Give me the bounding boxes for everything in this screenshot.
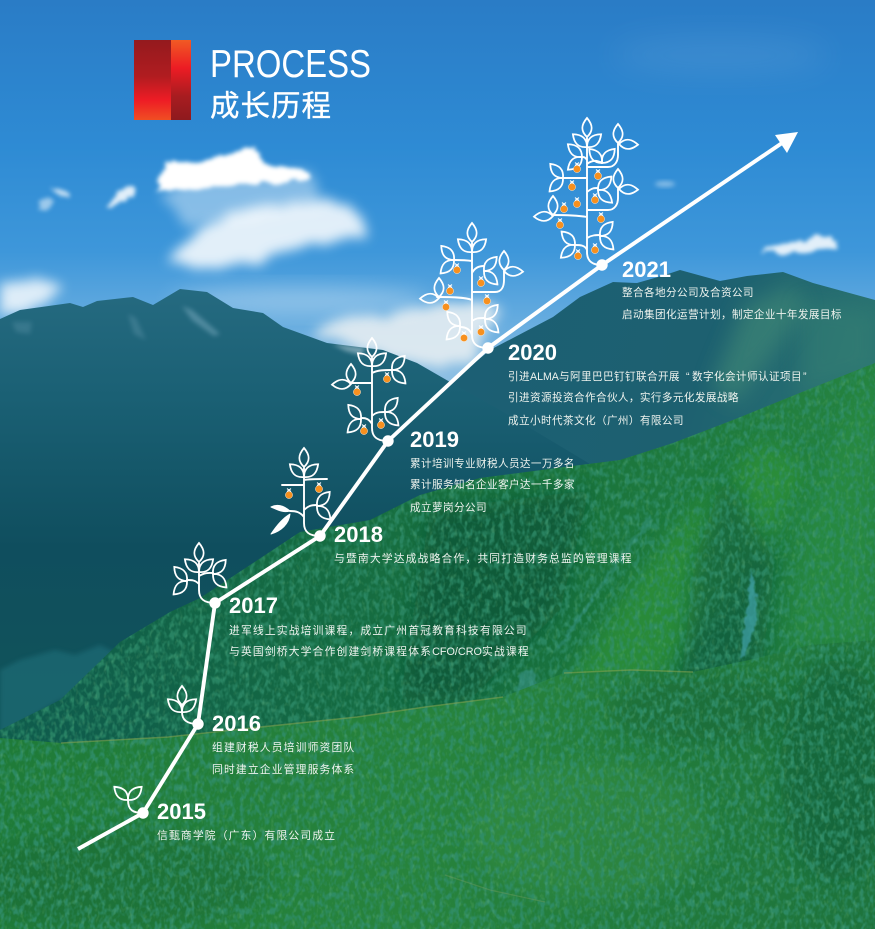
milestone 2020: ” — [803, 371, 807, 383]
milestone 2020: 2020 — [508, 340, 557, 365]
clouds — [0, 37, 835, 368]
milestone 2020: 引进资源投资合作合伙人，实行多元化发展战略 — [508, 391, 739, 404]
milestone 2018: 2018 — [334, 522, 383, 547]
tree 2017 — [170, 543, 230, 603]
milestone 2016: 2016 — [212, 711, 261, 736]
icon: red square — [134, 40, 191, 120]
title block — [134, 40, 371, 123]
milestone 2018: 与暨南大学达成战略合作，共同打造财务总监的管理课程 — [334, 551, 633, 565]
milestone 2019: 累计培训专业财税人员达一万多名 — [410, 457, 575, 470]
milestone 2017: 进军线上实战培训课程，成立广州首冠教育科技有限公司 — [229, 623, 528, 637]
milestone 2021: 2021 — [622, 257, 671, 282]
milestone 2020: 引进ALMA — [508, 371, 559, 383]
milestone 2015: 信甄商学院（广东）有限公司成立 — [157, 828, 336, 842]
milestone 2016 — [212, 711, 355, 776]
heading: PROCESS: PROCESS — [210, 43, 371, 86]
tree 2015 — [111, 783, 145, 813]
milestone 2015 — [157, 799, 336, 842]
background: front green hill — [0, 640, 875, 929]
water streaks — [518, 515, 757, 694]
timeline nodes — [137, 259, 608, 819]
milestone 2020: 成立小时代茶文化（广州）有限公司 — [508, 414, 684, 427]
milestone 2017: 2017 — [229, 593, 278, 618]
heading: 成长历程: 成长历程 — [210, 90, 332, 123]
milestone 2015: 2015 — [157, 799, 206, 824]
tree 2019 — [332, 338, 409, 441]
milestone 2019: 2019 — [410, 427, 459, 452]
background: middle green hill — [0, 363, 875, 743]
background: sky — [0, 0, 875, 420]
milestone 2021: 整合各地分公司及合资公司 — [622, 286, 754, 299]
milestone 2020: “ — [686, 371, 690, 383]
milestone 2021 — [622, 257, 842, 321]
background: distant teal ridge — [0, 645, 170, 735]
milestone 2021: 启动集团化运营计划，制定企业十年发展目标 — [622, 308, 842, 321]
milestone 2019 — [410, 427, 575, 514]
milestone 2017: 实战课程 — [482, 644, 530, 658]
milestone 2018 — [334, 522, 633, 565]
milestone 2019: 成立萝岗分公司 — [410, 501, 487, 514]
tree 2018 — [271, 448, 334, 536]
growth arrow — [78, 132, 798, 849]
tree 2020 — [420, 223, 523, 348]
milestone 2017: 与英国剑桥大学合作创建剑桥课程体系CFO/CRO — [229, 646, 482, 658]
tree 2021 — [534, 118, 638, 265]
milestone 2017 — [229, 593, 530, 658]
background: far right mountain — [452, 270, 875, 464]
milestone 2020: 与阿里巴巴钉钉联合开展 — [559, 370, 680, 383]
milestone 2016: 同时建立企业管理服务体系 — [212, 762, 355, 776]
milestone 2016: 组建财税人员培训师资团队 — [212, 740, 355, 754]
background: left mountain — [0, 289, 600, 760]
milestone 2020: 数字化会计师认证项目 — [692, 370, 802, 383]
tree 2016 — [165, 686, 199, 724]
milestone 2020 — [508, 340, 807, 427]
milestone 2019: 累计服务知名企业客户达一千多家 — [410, 478, 575, 491]
